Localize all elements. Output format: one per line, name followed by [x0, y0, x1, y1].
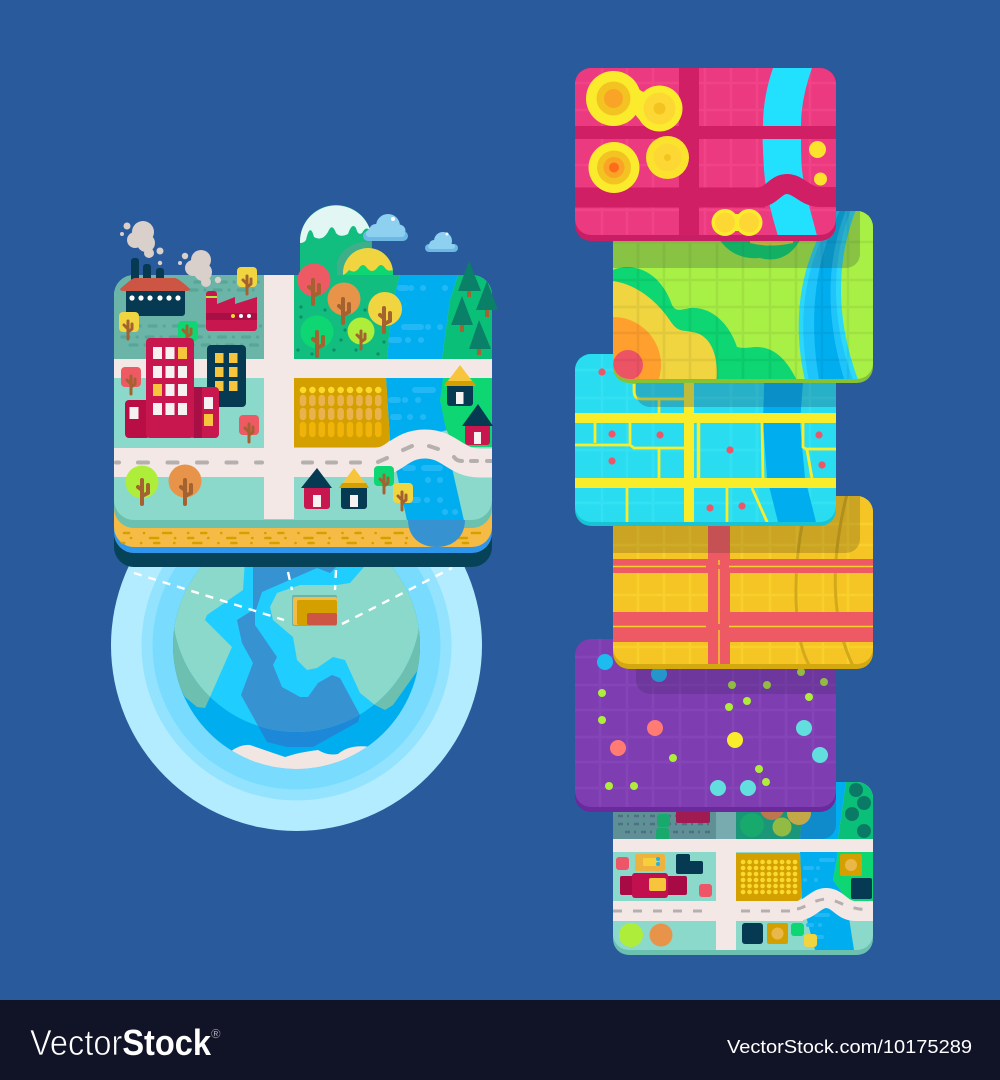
road bridge — [758, 184, 836, 198]
lower river — [396, 458, 464, 520]
road centre lines — [613, 560, 873, 665]
green squares — [656, 814, 670, 841]
map layer: purple points — [575, 620, 896, 812]
shadow from pink layer — [590, 195, 860, 268]
top hill — [713, 225, 800, 259]
river — [763, 68, 817, 236]
forest dots — [296, 305, 386, 356]
smoke puffs — [120, 221, 221, 287]
peak contour — [613, 350, 643, 380]
ground dashes — [122, 282, 262, 345]
yellow contour — [613, 281, 717, 385]
grid — [613, 496, 873, 664]
yellow capped hill — [343, 248, 393, 300]
shadow from yellow layer — [636, 620, 896, 694]
tree canopies — [740, 812, 811, 837]
lit side of globe with continents — [174, 567, 419, 769]
map layer: green elevation — [565, 195, 873, 413]
large points — [597, 654, 828, 796]
green contour — [613, 267, 799, 385]
river outflow waterfall — [408, 520, 465, 547]
road dashes — [613, 899, 873, 911]
shadow from green layer — [636, 360, 876, 407]
shadow from purple layer — [613, 797, 836, 839]
river ripples — [391, 288, 455, 512]
river bands — [799, 205, 860, 385]
upper river — [387, 275, 458, 359]
factory — [120, 278, 190, 316]
polar ice cap — [232, 744, 368, 769]
crop dots — [743, 862, 797, 892]
globe with atmosphere — [111, 566, 482, 831]
top building — [676, 812, 710, 823]
heat spot lower left — [588, 142, 640, 193]
shaded globe sphere — [173, 567, 420, 769]
zoom marker card on globe — [292, 595, 337, 626]
snowy mountain — [300, 205, 372, 285]
magenta apartment building — [125, 338, 219, 438]
bottom row items — [619, 923, 817, 947]
magenta factory — [206, 291, 257, 331]
roads — [613, 839, 873, 950]
lime points — [598, 689, 813, 790]
bridge — [375, 444, 492, 463]
map layer: cyan street network — [575, 354, 876, 530]
small heat spots by river — [809, 141, 827, 186]
grid — [575, 354, 836, 522]
orange contour — [565, 317, 661, 413]
green forest edge — [838, 782, 873, 839]
left block buildings — [616, 854, 712, 898]
road dashes — [116, 446, 492, 462]
land surface — [114, 275, 492, 525]
map layer: pink heat map — [575, 68, 836, 241]
right meadow — [440, 378, 492, 447]
bridge — [795, 898, 873, 911]
river ripples — [805, 860, 833, 937]
image id: VectorStock.com/10175289 — [727, 1036, 972, 1057]
map layer: yellow roads — [590, 480, 873, 669]
right block buildings — [840, 854, 872, 899]
forest block — [736, 812, 802, 839]
pine trees — [451, 261, 498, 355]
right forest — [442, 275, 492, 359]
map layer: city plan — [613, 782, 873, 955]
clouds — [363, 214, 458, 252]
dark office tower — [207, 345, 246, 407]
middle river — [386, 378, 447, 447]
footer bar — [0, 1000, 1000, 1080]
heat spot top right — [636, 86, 682, 132]
small square trees — [119, 267, 413, 510]
contour lines — [796, 490, 854, 668]
forest block — [294, 275, 400, 359]
heat spot top left — [586, 71, 645, 126]
river blocks — [800, 782, 854, 950]
industrial district ground — [114, 275, 264, 359]
logo wordmark: VectorStock — [30, 1022, 212, 1063]
river — [763, 354, 818, 530]
heat spot lower right — [646, 136, 689, 179]
houses — [301, 365, 493, 509]
shadow from cyan layer — [590, 480, 860, 553]
dashed projection lines — [134, 568, 452, 624]
grid — [575, 639, 836, 807]
repaint main street crossing — [575, 413, 836, 423]
forest canopies — [845, 783, 871, 838]
round trees on lower road — [126, 464, 202, 504]
meadow — [833, 852, 873, 901]
roads — [575, 68, 836, 235]
thin streets — [575, 384, 836, 526]
roads — [114, 275, 492, 519]
place markers — [598, 368, 826, 512]
grid — [575, 68, 836, 235]
middle field — [294, 378, 390, 447]
city island — [114, 205, 498, 567]
crop rows — [303, 390, 378, 434]
island strata — [114, 500, 492, 567]
atmosphere rings — [111, 460, 482, 831]
twin heat spot — [712, 209, 762, 236]
red roads — [613, 496, 873, 664]
registered mark: ® — [211, 1026, 221, 1041]
grid — [613, 211, 873, 379]
main streets — [575, 380, 836, 522]
ground dashes — [618, 816, 712, 832]
factory chimneys — [131, 258, 164, 282]
crop field — [736, 853, 802, 901]
shaded points — [651, 666, 828, 689]
round trees in forest — [298, 264, 402, 356]
